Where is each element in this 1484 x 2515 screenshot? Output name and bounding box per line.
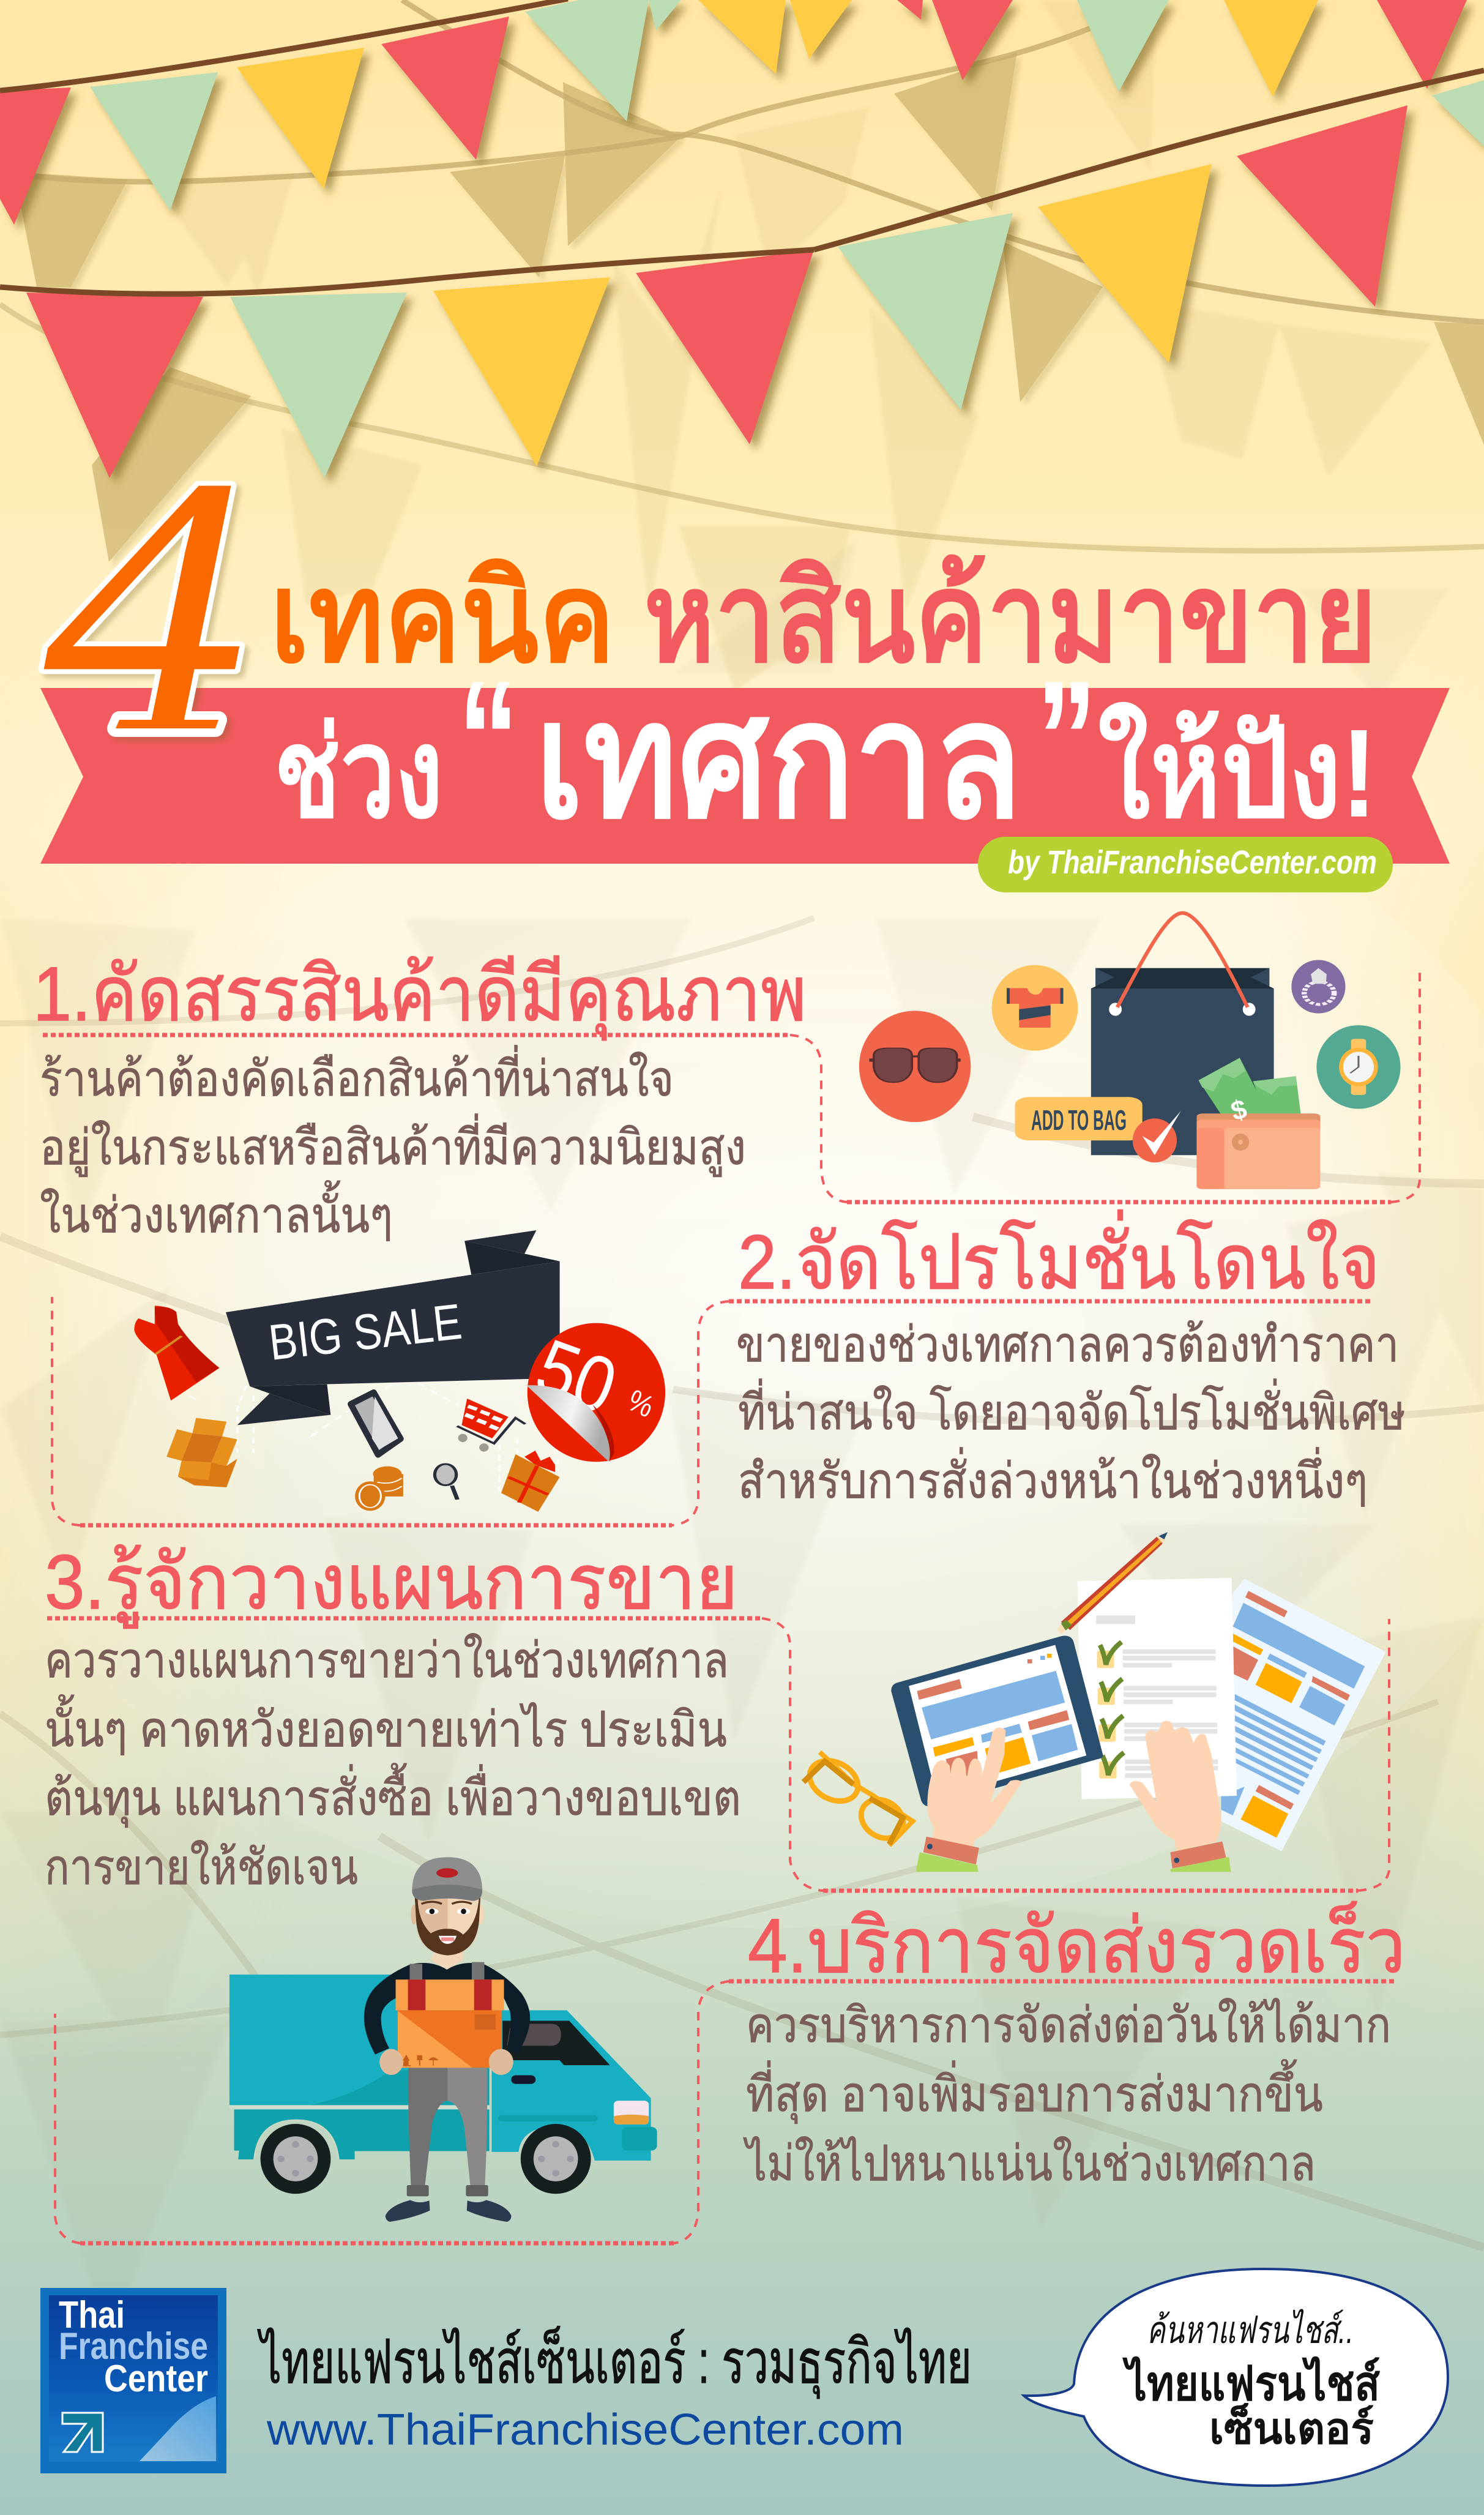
- section 4 dashed frame: [55, 1981, 1396, 2243]
- section 4 text block: ไม่ให้ไปหนาแน่นในช่วงเทศกาล: [743, 2136, 1316, 2191]
- section 1 dashed frame: [43, 973, 1420, 1202]
- section 3 text block: การขายให้ชัดเจน: [45, 1839, 358, 1894]
- courier man: [364, 1857, 530, 2222]
- sale ribbon: [226, 1230, 560, 1425]
- icon: pencil: [1057, 1532, 1168, 1634]
- title line 2: ”: [1036, 647, 1097, 831]
- icon: coins: [355, 1467, 403, 1511]
- title line 2: “: [458, 647, 519, 831]
- carton box: [396, 1979, 504, 2068]
- icon: sunglasses: [859, 1011, 971, 1122]
- big numeral 4: 4: [43, 402, 248, 802]
- upper bunting: [0, 0, 1467, 225]
- icon: parcel box: [166, 1418, 237, 1487]
- 50 percent sticker: [528, 1323, 665, 1462]
- icon: shirt: [992, 965, 1078, 1051]
- brand name: ไทยแฟรนไชส์เซ็นเตอร์ : รวมธุรกิจไทย: [257, 2325, 972, 2399]
- section 4 text block: ควรบริหารการจัดส่งต่อวันให้ได้มาก: [746, 1997, 1391, 2052]
- logo text: Center: [104, 2358, 208, 2400]
- section 1 text block: [40, 1045, 746, 1243]
- dollar sign: $: [1228, 1094, 1250, 1127]
- icon: watch: [1316, 1025, 1401, 1109]
- logo text: Thai: [59, 2294, 125, 2336]
- icon: wallet with banknotes: [1196, 1058, 1320, 1189]
- title line 1: [270, 548, 1377, 688]
- section 1 text block: ในช่วงเทศกาลนั้นๆ: [40, 1180, 393, 1243]
- title banner: [40, 688, 1450, 864]
- icon: magnifier: [434, 1464, 457, 1500]
- section 4 text block: ที่สุด อาจเพิ่มรอบการส่งมากขึ้น: [746, 2059, 1323, 2124]
- add to bag tag: [1015, 1097, 1143, 1140]
- title line 1: หาสินค้ามาขาย: [644, 548, 1377, 688]
- section 1 text block: อยู่ในกระแสหรือสินค้าที่มีความนิยมสูง: [40, 1114, 746, 1177]
- logo text: [59, 2294, 208, 2400]
- speech bubble: ค้นหาแฟรนไชส์..: [1147, 2309, 1354, 2352]
- add to bag label: ADD TO BAG: [1031, 1104, 1127, 1136]
- right document: [1221, 1579, 1386, 1851]
- section 2 text block: สำหรับการสั่งล่วงหน้าในช่วงหนึ่งๆ: [738, 1448, 1368, 1508]
- sale banner label: BIG SALE: [266, 1294, 464, 1371]
- icon: dress: [134, 1306, 219, 1400]
- credit pill: [978, 837, 1393, 892]
- logo wedge: [140, 2396, 216, 2461]
- section 1 text block: ร้านค้าต้องคัดเลือกสินค้าที่น่าสนใจ: [40, 1045, 674, 1106]
- icon: shopping cart: [457, 1399, 525, 1452]
- title line 2: ให้ปัง!: [1098, 701, 1377, 843]
- title line 1: เทคนิค: [270, 548, 615, 688]
- speech bubble: [1024, 2269, 1448, 2486]
- sticker peel: [526, 1385, 614, 1462]
- section 3 text block: ควรวางแผนการขายว่าในช่วงเทศกาล: [45, 1632, 729, 1687]
- tablet: [891, 1636, 1103, 1806]
- back bunting strings: [0, 0, 1484, 692]
- icon: check mark: [1133, 1111, 1181, 1162]
- section 2 dashed frame: [52, 1297, 1370, 1525]
- title line 2: [274, 647, 1377, 851]
- section 2 heading: 2.จัดโปรโมชั่นโดนใจ: [738, 1209, 1380, 1305]
- website url: www.ThaiFranchiseCenter.com: [266, 2405, 904, 2454]
- section 3 text block: ต้นทุน แผนการสั่งซื้อ เพื่อวางขอบเขต: [45, 1763, 741, 1828]
- section 4 heading: 4.บริการจัดส่งรวดเร็ว: [748, 1900, 1406, 1989]
- right hand: [1129, 1721, 1231, 1872]
- sticker percentage text: 50: [525, 1321, 628, 1432]
- front bunting: [0, 70, 1484, 478]
- title line 2: ช่วง: [274, 703, 443, 843]
- title line 2: เทศกาล: [535, 670, 1022, 851]
- sticker percentage text: %: [622, 1383, 659, 1424]
- section 3 dashed frame: [47, 1618, 1389, 1891]
- left hand: [916, 1728, 1022, 1872]
- section 4 text block: [743, 1997, 1391, 2191]
- illustration: tablet and documents: [802, 1532, 1386, 1872]
- speech bubble: เซ็นเตอร์: [1209, 2402, 1374, 2453]
- icon: shopping bag: [1091, 913, 1274, 1155]
- section 3 heading: 3.รู้จักวางแผนการขาย: [45, 1540, 738, 1629]
- logo text: Franchise: [59, 2325, 208, 2367]
- illustration: courier and van: [229, 1857, 657, 2222]
- checklist paper: [1078, 1578, 1237, 1799]
- section 2 text block: [736, 1317, 1406, 1508]
- icon: smartphone: [351, 1392, 401, 1455]
- section 3 text block: นั้นๆ คาดหวังยอดขายเท่าไร ประเมิน: [45, 1694, 727, 1757]
- section 3 text block: [45, 1632, 741, 1894]
- logo arrow: [62, 2413, 103, 2452]
- van: [229, 1975, 657, 2194]
- icon: gift: [501, 1451, 560, 1512]
- illustration: big sale banner: [134, 1230, 665, 1512]
- speech bubble: ไทยแฟรนไชส์: [1122, 2356, 1380, 2410]
- dashed guide lines: [189, 1382, 574, 1492]
- icon: glasses: [802, 1752, 912, 1845]
- illustration: shopping bag and icons: [859, 913, 1401, 1189]
- logo: [40, 2288, 226, 2473]
- credit pill: by ThaiFranchiseCenter.com: [1008, 844, 1377, 881]
- icon: ring: [1291, 960, 1346, 1014]
- section 1 heading: 1.คัดสรรสินค้าดีมีคุณภาพ: [33, 952, 807, 1041]
